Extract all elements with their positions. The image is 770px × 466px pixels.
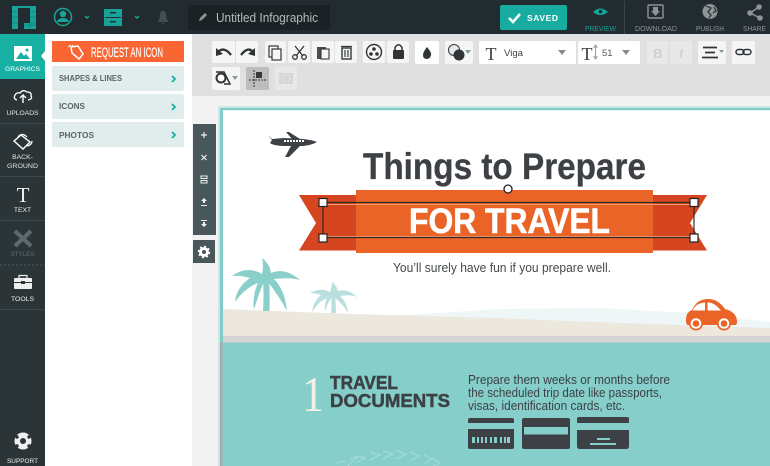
icon: orange car	[686, 299, 737, 330]
tab: background: BACK-	[12, 154, 33, 161]
tab: uploads: UPLOADS	[6, 110, 39, 117]
sand beach	[223, 309, 770, 336]
tab: tools: TOOLS	[11, 296, 34, 303]
asset panel	[45, 34, 192, 466]
section description	[468, 372, 670, 413]
section number 1: 1	[302, 366, 324, 422]
italic button disabled	[670, 41, 692, 64]
tab: styles	[0, 231, 45, 265]
link button	[732, 41, 755, 64]
chevron trail	[335, 450, 440, 466]
font size selector: 51	[602, 48, 613, 59]
delete page	[202, 155, 206, 160]
top bar	[0, 0, 770, 34]
icon: small palm tree	[310, 282, 357, 313]
selection box with handles	[319, 185, 698, 242]
tab: text: TEXT	[14, 207, 31, 214]
duplicate page	[201, 176, 207, 183]
preview action: PREVIEW	[585, 26, 616, 33]
icon: notification bell	[158, 11, 168, 24]
delete button	[335, 41, 357, 63]
preview action	[585, 8, 616, 33]
left sidebar	[0, 34, 45, 466]
saved button: SAVED	[527, 13, 558, 23]
document title box	[188, 5, 330, 30]
logo	[12, 6, 36, 29]
tab: text	[0, 183, 45, 221]
settings button	[193, 240, 215, 263]
menu item: photos	[52, 122, 184, 147]
font size selector: T	[582, 44, 592, 64]
tab: uploads	[0, 91, 45, 124]
icon: document cards	[468, 417, 629, 449]
download action: DOWNLOAD	[635, 26, 677, 33]
menu item: icons	[52, 94, 184, 119]
share action	[743, 4, 766, 33]
section description: Prepare them weeks or months before	[468, 372, 670, 387]
copy button	[265, 41, 286, 63]
snap button active	[246, 67, 269, 90]
saved button	[500, 5, 567, 30]
layers button	[363, 41, 385, 63]
request an icon button: REQUEST AN ICON	[91, 45, 163, 60]
tab: graphics	[0, 34, 45, 79]
tab: tools	[0, 276, 45, 310]
section heading	[330, 372, 450, 411]
tab: text: T	[17, 183, 30, 207]
menu item: icons: ICONS	[59, 101, 85, 111]
bold button disabled	[647, 41, 668, 64]
lock button	[387, 41, 409, 63]
editor toolbar background	[192, 34, 770, 96]
font selector: Viga	[504, 48, 524, 59]
subtitle: You’ll surely have fun if you prepare well.	[393, 261, 611, 275]
undo button	[212, 41, 235, 63]
tab: graphics: GRAPHICS	[5, 66, 40, 73]
tab: support: SUPPORT	[7, 458, 38, 465]
publish action	[696, 4, 724, 33]
formatting toolbar	[212, 41, 755, 90]
paste button	[312, 41, 334, 63]
section heading: DOCUMENTS	[330, 390, 450, 411]
cut button	[288, 41, 310, 63]
font selector	[479, 41, 576, 64]
align button	[698, 41, 726, 64]
title: Things to Prepare	[363, 146, 646, 187]
italic button disabled: I	[679, 46, 683, 61]
shape picker button	[212, 67, 240, 90]
font size selector	[578, 41, 640, 64]
share action: SHARE	[743, 26, 766, 33]
section description: the scheduled trip date like passports,	[468, 385, 662, 400]
crop button disabled	[275, 67, 297, 90]
opacity button	[415, 41, 439, 64]
tab: background: GROUND	[7, 163, 38, 170]
add page	[201, 132, 207, 138]
font selector: T	[486, 44, 496, 64]
menu item: shapes and lines: SHAPES & LINES	[59, 73, 122, 83]
tab: styles: STYLES	[10, 251, 35, 258]
icon: airplane	[268, 132, 317, 157]
icon: file cabinet	[104, 9, 139, 26]
menu item: shapes and lines	[52, 66, 184, 91]
section description: visas, identification cards, etc.	[468, 398, 625, 413]
icon: large palm tree	[232, 258, 300, 311]
bold button disabled: B	[653, 46, 663, 61]
vertical page toolbar	[193, 124, 216, 235]
move page down	[201, 220, 207, 227]
document title box: Untitled Infographic	[216, 11, 318, 25]
banner text: FOR TRAVEL	[409, 202, 610, 241]
tab: support	[7, 432, 38, 465]
ribbon banner	[299, 190, 707, 253]
download action	[635, 5, 677, 33]
tab: background	[0, 134, 45, 177]
infographic canvas	[218, 106, 770, 466]
icon: user	[54, 8, 89, 26]
background sky strip	[390, 308, 770, 332]
color picker button	[445, 41, 473, 64]
publish action: PUBLISH	[696, 26, 724, 33]
request an icon button	[52, 41, 184, 62]
move page up	[201, 198, 207, 206]
section heading: TRAVEL	[330, 372, 398, 393]
redo button	[236, 41, 258, 63]
menu item: photos: PHOTOS	[59, 130, 94, 140]
